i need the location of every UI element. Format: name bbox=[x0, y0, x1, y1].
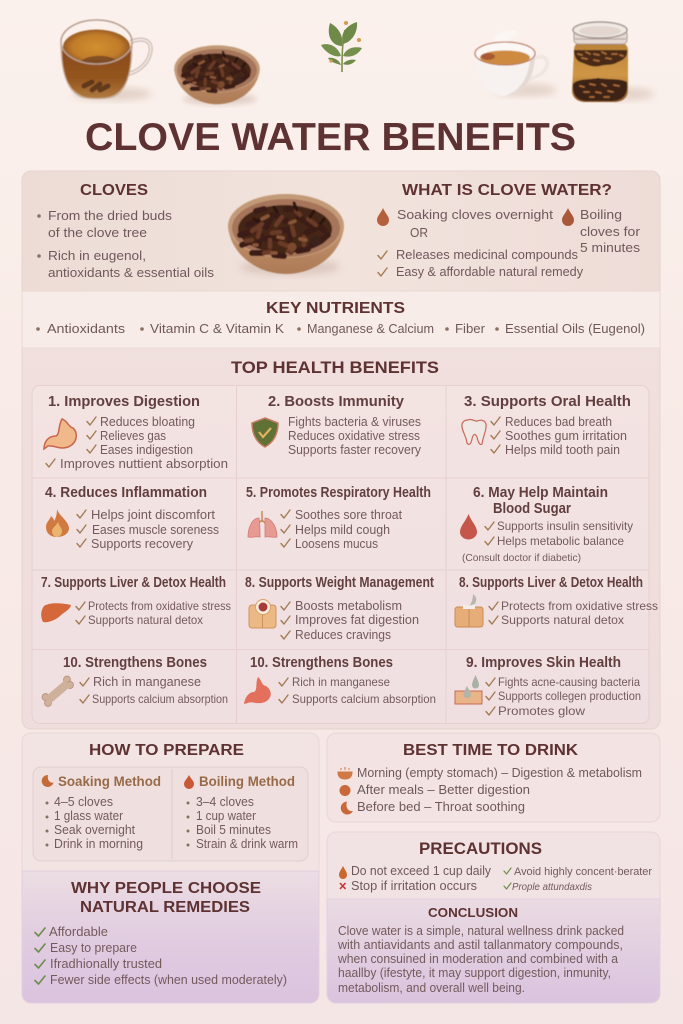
card: supports liver and detox health: 7. Supports Liver & Detox Health bbox=[41, 575, 226, 591]
heading: conclusion: CONCLUSION bbox=[428, 905, 518, 920]
icon: warning drop bbox=[339, 866, 347, 879]
panel: best time to drink bbox=[327, 733, 660, 822]
list: what is clove water: 5 minutes bbox=[580, 240, 641, 255]
heading: precautions: PRECAUTIONS bbox=[419, 839, 542, 858]
text: conclusion paragraph: with antiavidants and astil tallanmatory compounds, bbox=[337, 938, 623, 952]
card: improves skin health: 9. Improves Skin Health bbox=[466, 655, 621, 671]
text: do not exceed: Do not exceed 1 cup daily bbox=[351, 863, 491, 878]
card: supports liver and detox health, repeated: Protects from oxidative stress bbox=[501, 599, 658, 613]
card: boosts immunity: 2. Boosts Immunity bbox=[268, 394, 404, 410]
list: what is clove water: Soaking cloves overnight bbox=[397, 207, 553, 222]
heading: key nutrients: KEY NUTRIENTS bbox=[266, 300, 405, 317]
card: supports weight management: 8. Supports Weight Management bbox=[245, 575, 434, 591]
heading: why people choose: NATURAL REMEDIES bbox=[80, 899, 250, 916]
card: supports oral health: Reduces bad breath bbox=[505, 415, 612, 429]
icon: stomach bbox=[44, 419, 76, 449]
card: supports weight management: Boosts metabolism bbox=[295, 599, 402, 613]
card: boosts immunity: Supports faster recovery bbox=[288, 443, 422, 457]
list: what is clove water: cloves for bbox=[580, 224, 641, 239]
list: reasons: Ifradhionally trusted bbox=[50, 957, 162, 971]
heading: top health benefits: TOP HEALTH BENEFITS bbox=[231, 358, 439, 377]
list: nutrients: Antioxidants bbox=[47, 321, 126, 336]
icon: liver bbox=[41, 603, 71, 622]
icon: soaking moon bbox=[42, 775, 54, 787]
icon: belly with target bbox=[249, 600, 276, 628]
list: reasons: Affordable bbox=[49, 925, 108, 939]
icon: stomach bbox=[244, 677, 271, 704]
list: reasons bbox=[35, 925, 287, 987]
card: boosts immunity: Fights bacteria & viruses bbox=[288, 415, 421, 429]
photo: white tea cup bbox=[475, 30, 557, 96]
list: boiling steps bbox=[186, 795, 298, 851]
list: cloves facts bbox=[37, 208, 215, 280]
heading: why people choose: WHY PEOPLE CHOOSE bbox=[71, 880, 261, 897]
card: improves digestion: Improves nuttient absorption bbox=[60, 457, 228, 471]
card: strengthens bones: Rich in manganese bbox=[93, 674, 201, 689]
card: reduces inflammation: Helps joint discomfort bbox=[91, 508, 216, 522]
card: improves digestion: Relieves gas bbox=[100, 429, 166, 443]
box: preparation methods bbox=[33, 767, 308, 861]
list: boiling steps: Strain & drink warm bbox=[196, 837, 298, 851]
title: CLOVE WATER BENEFITS bbox=[85, 116, 576, 159]
card: improves digestion bbox=[44, 394, 228, 471]
list: cloves facts: Rich in eugenol, bbox=[48, 248, 146, 263]
card: improves skin health: Supports collegen production bbox=[498, 689, 641, 703]
card: reduces inflammation: 4. Reduces Inflammation bbox=[45, 485, 207, 501]
card: supports weight management: Improves fat digestion bbox=[295, 613, 419, 627]
text: avoid concentrates: Avoid highly concent·berater bbox=[514, 866, 652, 878]
card: supports liver and detox health: Supports natural detox bbox=[88, 613, 203, 627]
icon: bone bbox=[42, 676, 74, 706]
text: after meals: After meals – Better digestion bbox=[357, 782, 530, 797]
list: nutrients bbox=[36, 321, 645, 336]
list: soaking steps: 1 glass water bbox=[54, 809, 123, 823]
text: conclusion paragraph: metabolism, and overall well being. bbox=[338, 981, 525, 995]
card: improves skin health bbox=[455, 655, 641, 718]
text: conclusion paragraph: haallby (ifestyte, it may support digestion, inmunity, bbox=[338, 966, 611, 980]
card: supports weight management: Reduces cravings bbox=[295, 628, 391, 642]
card: boosts immunity bbox=[252, 394, 422, 457]
card: improves digestion: Eases indigestion bbox=[100, 443, 193, 457]
card: reduces inflammation: Eases muscle soreness bbox=[92, 523, 219, 537]
card: may help maintain blood sugar: Supports insulin sensitivity bbox=[497, 519, 633, 533]
list: nutrients: Fiber bbox=[455, 321, 486, 336]
heading: best time to drink: BEST TIME TO DRINK bbox=[403, 742, 578, 759]
photo: small bowl of cloves bbox=[174, 45, 260, 105]
list: what is clove water bbox=[377, 207, 641, 279]
list: cloves facts: From the dried buds bbox=[48, 208, 173, 223]
icon: blood drop bbox=[460, 514, 477, 540]
text: stop if irritation: Stop if irritation occurs bbox=[351, 878, 477, 893]
card: promotes respiratory health: 5. Promotes Respiratory Health bbox=[246, 485, 431, 501]
list: cloves facts: of the clove tree bbox=[48, 225, 147, 240]
list: what is clove water: OR bbox=[410, 225, 428, 240]
card: improves digestion: 1. Improves Digestion bbox=[48, 394, 200, 410]
photo: bowl of cloves bbox=[228, 194, 344, 275]
card: supports oral health: Soothes gum irritation bbox=[505, 429, 627, 443]
list: reasons: Fewer side effects (when used moderately) bbox=[50, 973, 287, 987]
card: promotes respiratory health: Loosens mucus bbox=[295, 537, 378, 551]
icon: tooth bbox=[462, 419, 486, 445]
list: soaking steps: 4–5 cloves bbox=[54, 795, 113, 809]
list: nutrients: Vitamin C & Vitamin K bbox=[150, 321, 284, 336]
card: strengthens bones: Supports calcium absorption bbox=[92, 692, 228, 706]
panel: how to prepare bbox=[22, 733, 319, 871]
card: may help maintain blood sugar: Blood Sugar bbox=[493, 501, 571, 517]
card: improves skin health: Promotes glow bbox=[498, 704, 585, 718]
card: supports liver and detox health, repeated: Supports natural detox bbox=[501, 613, 624, 627]
list: boiling steps: Boil 5 minutes bbox=[196, 823, 271, 837]
card: boosts immunity: Reduces oxidative stress bbox=[288, 429, 420, 443]
card: may help maintain blood sugar: (Consult doctor if diabetic) bbox=[462, 552, 581, 564]
list: boiling steps: 3–4 cloves bbox=[196, 795, 254, 809]
card: improves skin health: Fights acne-causing bacteria bbox=[498, 675, 640, 689]
icon: lungs bbox=[248, 511, 277, 537]
list: soaking steps: Seak overnight bbox=[54, 823, 136, 837]
heading: cloves: CLOVES bbox=[80, 182, 148, 199]
photo: glass mug of clove tea bbox=[61, 20, 152, 100]
icon: box with droplet bbox=[455, 594, 483, 627]
card: strengthens bones, repeated bbox=[244, 655, 436, 706]
icon: herb sprig bbox=[321, 21, 362, 72]
card: supports weight management bbox=[245, 575, 434, 642]
icon: after meals bbox=[340, 785, 350, 796]
list: cloves facts: antioxidants & essential oils bbox=[48, 265, 215, 280]
list: boiling steps: 1 cup water bbox=[196, 809, 256, 823]
card: may help maintain blood sugar bbox=[460, 485, 633, 564]
panel: main background bbox=[22, 171, 660, 729]
text: before bed: Before bed – Throat soothing bbox=[357, 799, 525, 814]
text: conclusion paragraph: Clove water is a simple, natural wellness drink packed bbox=[338, 924, 624, 938]
card: supports liver and detox health bbox=[41, 575, 231, 627]
heading: boiling method: Boiling Method bbox=[199, 774, 295, 789]
list: soaking steps: Drink in morning bbox=[54, 837, 143, 851]
icon: flame bbox=[46, 509, 69, 537]
heading: how to prepare: HOW TO PREPARE bbox=[89, 742, 244, 759]
card: reduces inflammation: Supports recovery bbox=[91, 537, 194, 551]
heading: what is clove water: WHAT IS CLOVE WATER? bbox=[402, 182, 612, 199]
card: may help maintain blood sugar: Helps metabolic balance bbox=[497, 534, 624, 548]
text: people note: Prople attundaxdis bbox=[512, 882, 592, 893]
text: morning: Morning (empty stomach) – Digestion & metabolism bbox=[357, 765, 642, 780]
list: what is clove water: Easy & affordable natural remedy bbox=[396, 264, 583, 279]
panel: cloves and what is clove water bbox=[22, 171, 660, 291]
list: nutrients: Essential Oils (Eugenol) bbox=[505, 321, 645, 336]
list: what is clove water: Releases medicinal compounds bbox=[396, 247, 578, 262]
icon: before bed bbox=[341, 802, 353, 814]
list: soaking steps bbox=[46, 795, 143, 851]
icon: cross bbox=[340, 883, 346, 889]
card: may help maintain blood sugar: 6. May Help Maintain bbox=[473, 485, 608, 501]
heading: why people choose bbox=[71, 880, 261, 916]
card: supports liver and detox health, repeated: 8. Supports Liver & Detox Health bbox=[459, 575, 643, 591]
list: what is clove water: Boiling bbox=[580, 207, 622, 222]
card: supports oral health: Helps mild tooth pain bbox=[505, 443, 620, 457]
panel: precautions bbox=[327, 832, 660, 899]
card: supports oral health bbox=[462, 394, 631, 457]
card: supports liver and detox health: Protects from oxidative stress bbox=[88, 599, 231, 613]
list: reasons: Easy to prepare bbox=[50, 941, 137, 955]
icon: boiling flame bbox=[184, 775, 194, 789]
photo: glass jar of clove water bbox=[572, 22, 654, 102]
card: promotes respiratory health: Soothes sore throat bbox=[295, 508, 403, 522]
panel: why people choose natural remedies bbox=[22, 871, 319, 1003]
panel: conclusion bbox=[327, 899, 660, 1003]
panel: benefits grid bbox=[32, 386, 658, 724]
text: conclusion paragraph bbox=[337, 924, 624, 995]
card: strengthens bones bbox=[42, 655, 228, 706]
card: supports liver and detox health, repeated bbox=[455, 575, 658, 627]
panel: key nutrients bbox=[22, 291, 660, 348]
list: nutrients: Manganese & Calcium bbox=[307, 321, 434, 336]
text: conclusion paragraph: when consuined in moderation and combined with a bbox=[337, 952, 618, 966]
card: supports oral health: 3. Supports Oral Health bbox=[464, 394, 631, 410]
card: promotes respiratory health bbox=[246, 485, 431, 551]
card: strengthens bones, repeated: Supports calcium absorption bbox=[292, 692, 436, 706]
card: strengthens bones, repeated: 10. Strengthens Bones bbox=[250, 655, 393, 671]
card: strengthens bones: 10. Strengthens Bones bbox=[63, 655, 207, 671]
icon: skin with droplets bbox=[455, 675, 482, 704]
card: reduces inflammation bbox=[45, 485, 219, 551]
card: improves digestion: Reduces bloating bbox=[100, 415, 195, 429]
heading: soaking method: Soaking Method bbox=[58, 774, 161, 789]
icon: shield bbox=[252, 418, 278, 447]
icon: morning bbox=[338, 767, 352, 779]
card: strengthens bones, repeated: Rich in manganese bbox=[292, 675, 390, 689]
card: promotes respiratory health: Helps mild cough bbox=[295, 523, 390, 537]
